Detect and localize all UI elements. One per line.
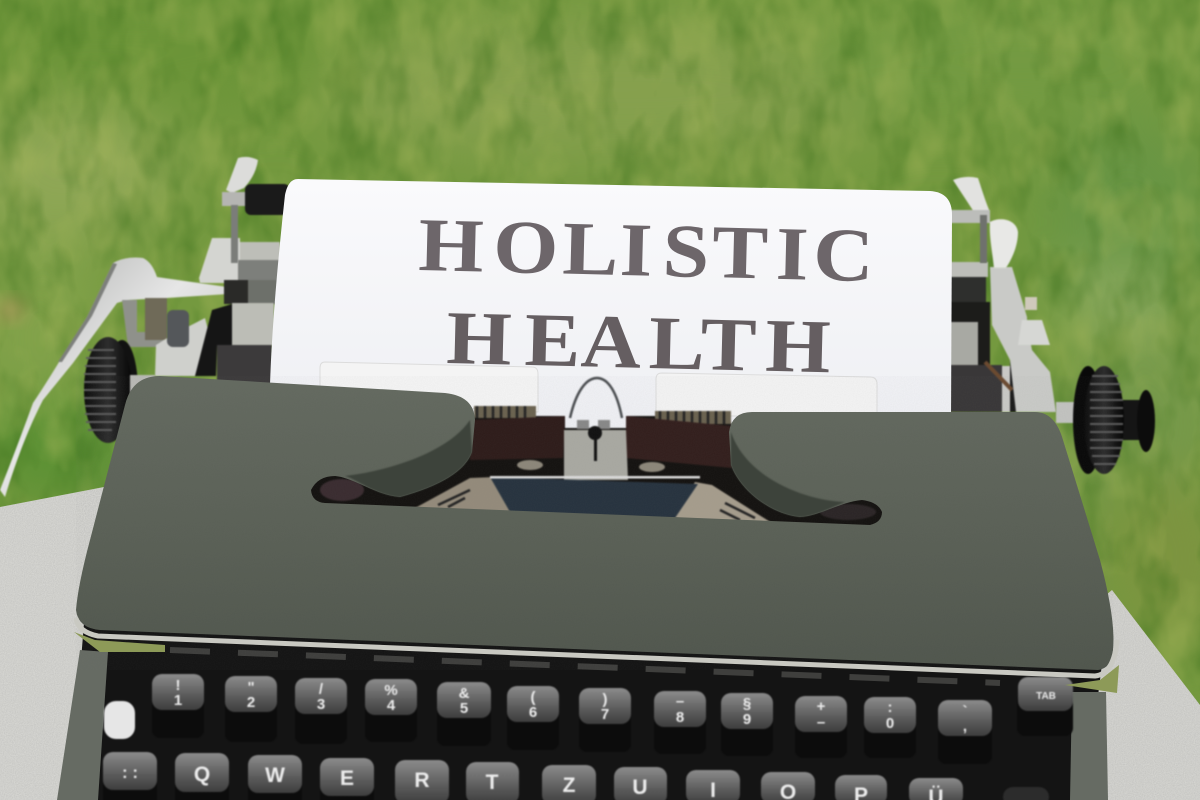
key row 1: : (888, 699, 892, 716)
key row 2: W (265, 764, 285, 787)
key row 1: / (319, 681, 324, 698)
keyboard base (57, 610, 1108, 800)
left paper release lever and black roller knob (222, 157, 290, 263)
key row 1: + (817, 698, 826, 715)
key row 1: 4 (387, 697, 396, 714)
ribbon guide plate (564, 430, 628, 480)
silver release knob (104, 701, 135, 739)
wire paper bail (570, 378, 622, 418)
slot interior mechanism (305, 378, 885, 530)
key row 1: 2 (247, 694, 255, 711)
ribbon left (470, 416, 565, 460)
feed teeth right (655, 411, 731, 424)
chrome trim (76, 618, 1117, 676)
type guide metal right (672, 482, 775, 525)
heading: HEALTH: HEALTH (446, 296, 832, 390)
key row 1: % (384, 682, 398, 699)
key row 1: TAB (1036, 691, 1056, 702)
key row 1: 5 (460, 700, 468, 717)
key row 1: – (817, 714, 825, 731)
left carriage return lever (0, 258, 228, 497)
key row 1: 8 (676, 709, 684, 726)
key row 2: E (340, 767, 354, 790)
left carriage mechanism (155, 238, 280, 384)
segment bar (490, 477, 698, 518)
key row 1: ( (530, 689, 536, 706)
key row 1: 6 (529, 704, 537, 721)
key row 2 (103, 752, 1049, 800)
left side panel (57, 650, 108, 800)
key row 1: 7 (601, 706, 609, 723)
type bar row (170, 650, 1000, 683)
right paper release levers (950, 177, 1018, 268)
small screws (517, 460, 543, 470)
key row 2: U (632, 776, 648, 799)
key row 1: – (676, 693, 684, 710)
key row 2: : : (122, 763, 138, 782)
feed teeth left (474, 406, 536, 418)
typewriter lid with flaps and slot (74, 376, 1119, 693)
key row 2: R (414, 769, 430, 792)
stone slab (0, 480, 1200, 800)
key row 1: , (963, 718, 967, 735)
key row 1: 9 (743, 711, 751, 728)
right side panel (1070, 692, 1108, 800)
key row 2: Q (194, 763, 210, 786)
key row 1: 3 (317, 696, 325, 713)
type guide metal left (415, 477, 512, 512)
left flap shadow (345, 420, 472, 497)
heading: HOLISTIC: HOLISTIC (418, 203, 875, 298)
paper guide right (656, 373, 877, 416)
key row 1: ` (962, 703, 968, 720)
key row 1: ! (176, 677, 180, 694)
key row 1: ) (602, 691, 608, 708)
key row 1: 0 (886, 715, 894, 732)
right knob (1056, 366, 1155, 474)
paper sheet with printed words (270, 179, 952, 432)
key row 2: Z (563, 774, 576, 797)
key row 2: T (486, 771, 499, 794)
key row 1: " (247, 679, 255, 696)
key row 1: 1 (174, 692, 182, 709)
left knob (84, 337, 155, 443)
trim reflections (74, 632, 165, 652)
key row 1 (152, 674, 1073, 764)
lever bracket (122, 300, 165, 347)
paper guide left (320, 362, 538, 412)
right flap shadow (731, 432, 845, 517)
ribbon right (626, 416, 732, 468)
key row 1: & (459, 685, 470, 702)
right carriage mechanism (950, 262, 1056, 412)
key row 1: § (743, 695, 751, 712)
